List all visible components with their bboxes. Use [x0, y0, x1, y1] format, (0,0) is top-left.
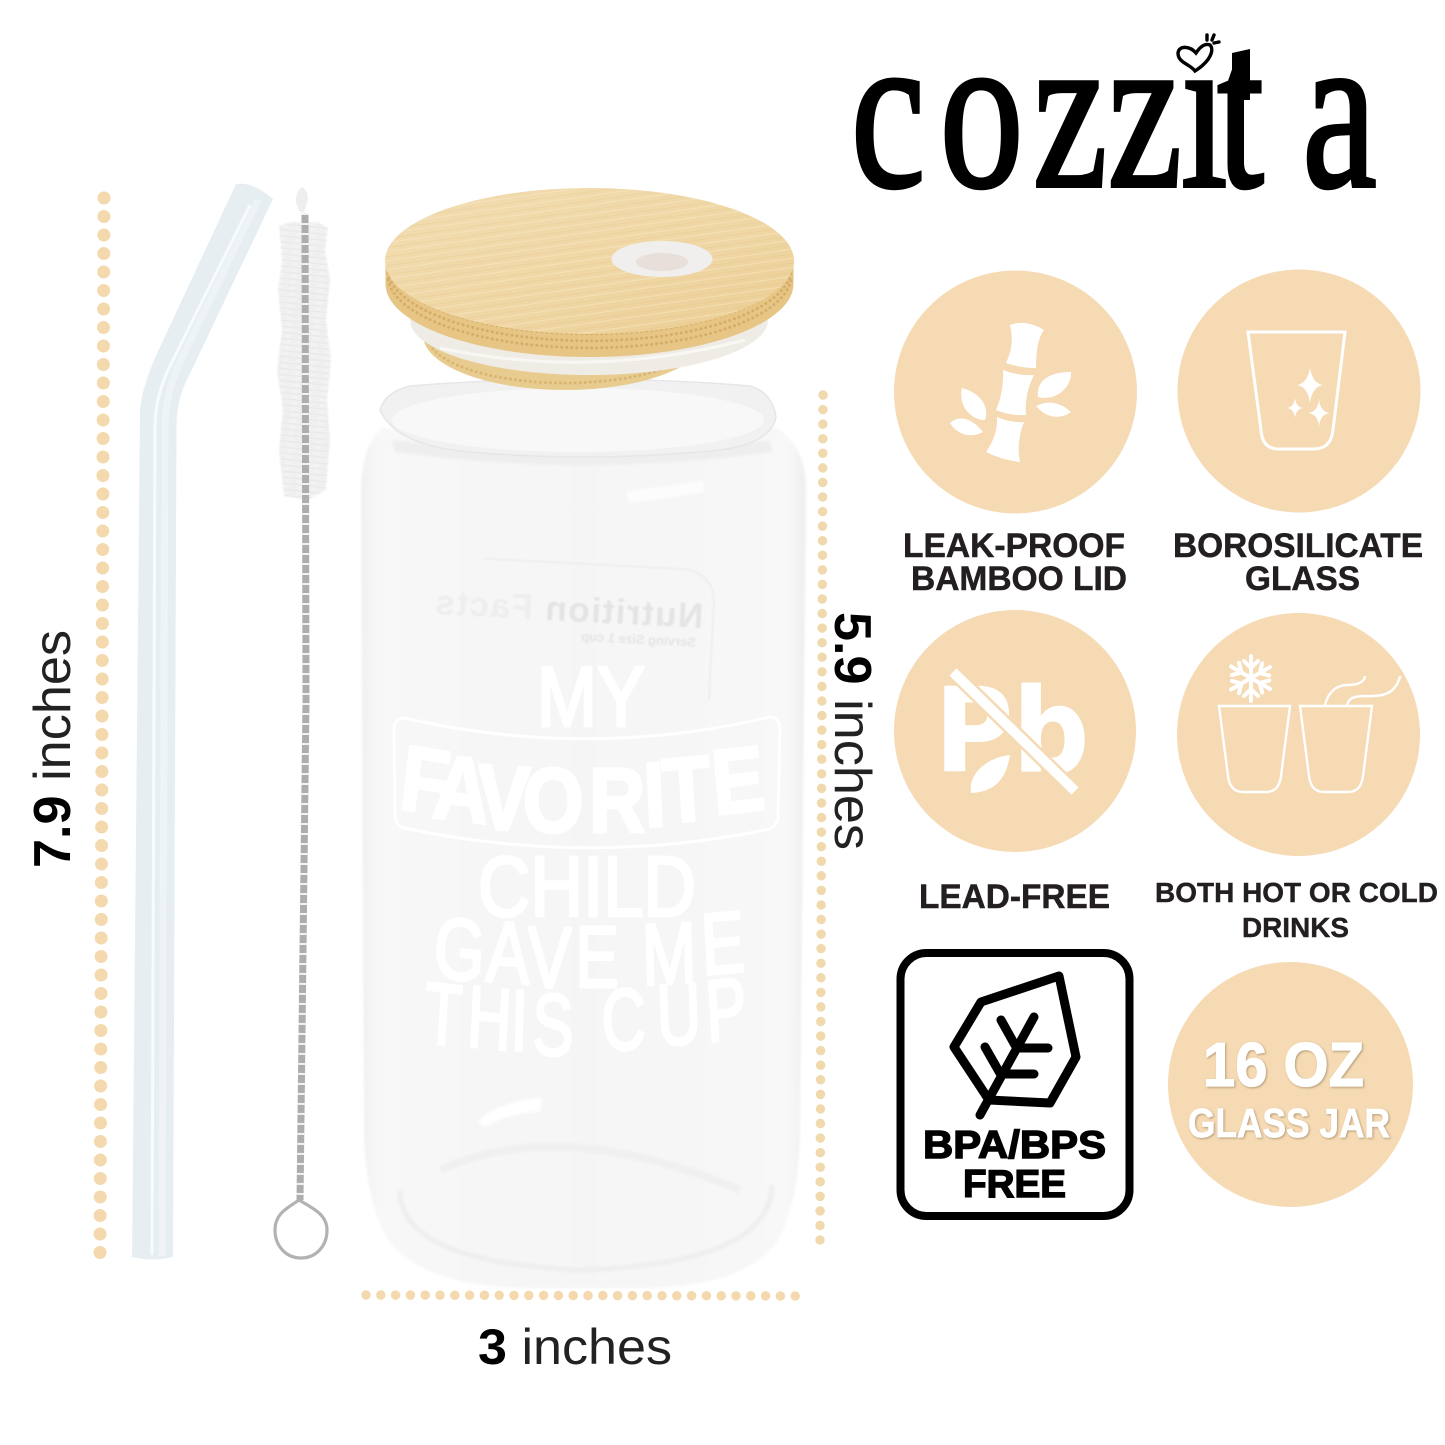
badge frame — [900, 953, 1130, 1216]
badge circle — [894, 610, 1136, 852]
cleaning brush — [275, 187, 331, 1258]
logo heart icon — [1178, 35, 1219, 71]
badge: hot or cold drinks — [1155, 613, 1438, 943]
icon: steam — [1325, 677, 1400, 705]
lower wooden plug — [423, 280, 707, 390]
straw hole centre — [636, 253, 688, 271]
logo dot mask — [1176, 26, 1224, 80]
badge: borosilicate glass — [1173, 270, 1423, 598]
label line 1: LEAK-PROOF — [903, 527, 1125, 565]
icon: cold cup — [1219, 706, 1290, 792]
icon: sparkles — [1287, 367, 1330, 427]
badge: BPA/BPS free — [900, 953, 1130, 1216]
slogan: MY: MY — [537, 650, 645, 745]
straw hole seal — [612, 241, 712, 277]
slogan: THIS CUP: THIS CUP — [422, 958, 749, 1074]
capacity text: 16 OZ — [1203, 1031, 1364, 1100]
jar top rim — [380, 379, 776, 457]
icon: hot cup — [1300, 706, 1372, 792]
bamboo lid — [385, 188, 794, 390]
rim shadow band — [392, 440, 772, 465]
printed slogan — [394, 650, 780, 1074]
wire loop — [275, 1200, 327, 1258]
slogan: FAVORITE: FAVORITE — [395, 727, 769, 852]
straw highlight — [152, 205, 250, 1255]
badge circle — [1168, 962, 1413, 1207]
icon: bamboo — [950, 323, 1071, 462]
icon: leaf — [971, 755, 1010, 793]
logo: cozzita — [851, 0, 1377, 236]
lower plug texture — [427, 335, 703, 383]
straw body — [132, 184, 273, 1260]
straw soft sheen — [162, 200, 258, 1256]
dimension dots: straw height — [100, 198, 104, 1254]
slogan frame — [394, 717, 780, 848]
badge: bamboo lid — [894, 270, 1137, 598]
lid top — [385, 188, 794, 334]
label line 2: BAMBOO LID — [911, 560, 1127, 598]
dimension dots: jar width — [366, 1295, 796, 1296]
icon: slash gap — [945, 664, 1080, 796]
label line 1: BOTH HOT OR COLD — [1155, 877, 1438, 908]
dimension dots: jar height — [820, 395, 823, 1241]
label line 1: BPA/BPS — [923, 1124, 1106, 1167]
silicone ring groove — [440, 340, 745, 362]
brush bristles — [277, 222, 331, 500]
badge circle — [894, 270, 1137, 514]
badge circle — [1178, 270, 1420, 512]
label line 1: BOROSILICATE — [1173, 527, 1423, 565]
lid grain — [385, 188, 794, 334]
glass highlight top — [625, 481, 705, 503]
icon: leaf outline — [954, 976, 1076, 1103]
glass highlight — [478, 1098, 542, 1127]
label line 2: FREE — [963, 1163, 1066, 1206]
badge circle — [1177, 613, 1420, 856]
lid side texture — [388, 266, 791, 348]
badge: lead free — [894, 610, 1136, 916]
mirrored serving size: Serving Size 1 cup — [581, 629, 696, 650]
label line 2: GLASS — [1245, 560, 1360, 598]
icon: slash — [953, 672, 1075, 791]
silicone ring — [410, 265, 768, 375]
slogan: CHILD: CHILD — [478, 840, 696, 935]
base inner shade — [440, 1147, 740, 1190]
slogan: GAVE ME: GAVE ME — [432, 893, 747, 1007]
brush tip — [296, 187, 308, 212]
jar body — [361, 427, 806, 1288]
base outer ring — [400, 1185, 772, 1270]
jar base ellipse — [400, 1147, 772, 1270]
jar opening — [392, 388, 764, 452]
nutrition panel outline — [476, 559, 716, 701]
dimension label: 3 inches: 3 inches — [478, 1319, 672, 1375]
label: LEAD-FREE — [919, 878, 1110, 916]
twisted wire — [300, 213, 306, 1200]
material text: GLASS JAR — [1188, 1100, 1390, 1146]
icon: Pb symbol: Pb — [935, 664, 1089, 799]
ghost nutrition panel — [430, 556, 716, 701]
dimension label: 5.9 inches: 5.9 inches — [823, 612, 881, 850]
icon: leaf veins — [980, 1017, 1048, 1115]
mirrored nutrition title: Nutrition Facts — [433, 583, 704, 636]
icon: leaf gap — [970, 750, 1014, 798]
label line 2: DRINKS — [1242, 912, 1349, 943]
glass straw — [132, 184, 273, 1260]
icon: glass outline — [1248, 332, 1345, 449]
icon: snowflake — [1228, 656, 1274, 701]
logo t ascender — [1232, 49, 1250, 100]
glass jar — [361, 379, 806, 1288]
dimension label: 7.9 inches: 7.9 inches — [24, 630, 82, 868]
lid side — [386, 261, 794, 357]
badge: 16 oz glass jar — [1168, 962, 1413, 1207]
